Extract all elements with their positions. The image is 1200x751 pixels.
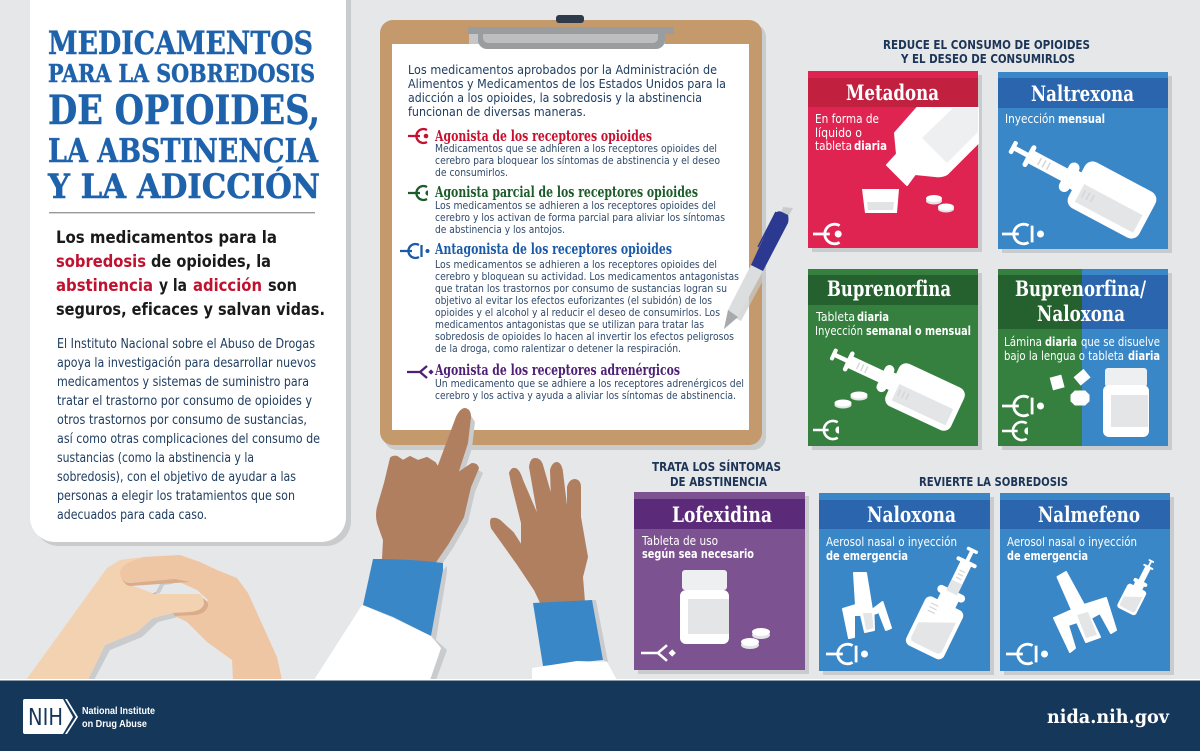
clipboard text bbox=[400, 62, 744, 402]
card: Metadona: diaria bbox=[854, 139, 887, 153]
illustration: clasped light hands bbox=[26, 555, 282, 680]
body paragraph: tratar el trastorno por consumo de opioides y bbox=[57, 394, 312, 409]
card: Lofexidina: Lofexidina bbox=[672, 502, 772, 527]
subtitle statement: seguros, eficaces y salvan vidas. bbox=[56, 300, 325, 319]
title: LA ABSTINENCIA bbox=[48, 131, 318, 170]
icon: antagonist symbol bbox=[826, 644, 868, 664]
definition: adrenergic agonist bbox=[407, 362, 744, 402]
intro text: adicción a los opioides, la sobredosis y la abstinencia bbox=[408, 90, 702, 105]
shirt cuff bbox=[363, 559, 443, 636]
definition: opioid agonist: de consumirlos. bbox=[435, 166, 508, 179]
footer bar bbox=[0, 679, 1200, 751]
icon: antagonist symbol bbox=[1002, 396, 1044, 416]
card: Naloxona: Naloxona bbox=[867, 502, 956, 527]
website: nida.nih.gov bbox=[1047, 706, 1170, 728]
definition: opioid agonist: cerebro para bloquear los síntomas de abstinencia y el deseo bbox=[435, 154, 720, 167]
section heading: reduce use bbox=[883, 38, 1090, 66]
card: Naloxona bbox=[819, 493, 994, 675]
icon: agonist bbox=[408, 129, 428, 143]
NIH logo bbox=[23, 699, 78, 734]
icon: methadone bottle bbox=[887, 108, 978, 185]
card: Metadona: Metadona bbox=[846, 80, 939, 105]
title bbox=[47, 24, 320, 207]
card: Lofexidina: según sea necesario bbox=[642, 547, 754, 561]
card: Lofexidina: Tableta de uso bbox=[641, 534, 718, 548]
institute name bbox=[82, 706, 155, 730]
card: Metadona: líquido o bbox=[815, 126, 862, 140]
icon: nasal spray bbox=[843, 573, 891, 638]
icon: pill bottle bbox=[680, 570, 729, 644]
icon: small vial and syringe bbox=[1116, 555, 1161, 616]
institute name: on Drug Abuse bbox=[82, 719, 147, 730]
card: Buprenorfina bbox=[808, 269, 982, 450]
definition: antagonist: Antagonista de los receptores opioides bbox=[434, 241, 672, 258]
icon: syringe and vial bbox=[999, 124, 1160, 242]
card: Nalmefeno bbox=[1000, 493, 1174, 675]
intro text bbox=[408, 62, 726, 119]
body paragraph: así como otras complicaciones del consumo de bbox=[57, 431, 320, 447]
card: Buprenorfina/Naloxona: bajo la lengua o tableta bbox=[1004, 349, 1124, 363]
definition: antagonist: sobredosis de opioides lo hacen al invertir los efectos peligrosos bbox=[435, 330, 734, 343]
card: Metadona bbox=[808, 71, 982, 252]
subtitle statement: Los medicamentos para la bbox=[56, 228, 277, 247]
card: Buprenorfina/Naloxona bbox=[998, 269, 1172, 450]
icon: tablets bbox=[741, 628, 770, 649]
definition: antagonist bbox=[400, 241, 739, 355]
intro text: Alimentos y Medicamentos de los Estados Unidos para la bbox=[408, 76, 726, 91]
body paragraph bbox=[57, 337, 320, 523]
card: Naltrexona: Naltrexona bbox=[1031, 81, 1134, 106]
definition: partial agonist: Los medicamentos se adhieren a los receptores opioides del bbox=[435, 199, 716, 212]
definition: antagonist: que tratan los trastornos por consumo de sustancias logran su bbox=[435, 282, 727, 295]
definition: opioid agonist: Medicamentos que se adhieren a los receptores opioides del bbox=[435, 142, 717, 155]
icon: adrenergic agonist bbox=[407, 366, 434, 378]
lab coat sleeve bbox=[314, 605, 441, 680]
card: Naltrexona bbox=[998, 72, 1172, 253]
card: Naloxona: Aerosol nasal o inyección bbox=[826, 535, 957, 549]
definition: partial agonist: cerebro y los activan de forma parcial para aliviar los síntomas bbox=[435, 211, 725, 224]
intro text: Los medicamentos aprobados por la Administración de bbox=[408, 62, 717, 77]
definition: antagonist: Los medicamentos se adhieren a los receptores opioides del bbox=[435, 258, 717, 271]
NIH logo: NIH bbox=[28, 705, 63, 731]
definition: adrenergic agonist: cerebro y los activa y ayuda a aliviar los síntomas de abstinencia. bbox=[435, 389, 736, 402]
subtitle statement: abstinencia bbox=[56, 276, 153, 295]
card: Nalmefeno: Nalmefeno bbox=[1038, 502, 1140, 527]
icon: partial agonist bbox=[408, 186, 428, 200]
card: Nalmefeno: de emergencia bbox=[1007, 549, 1088, 563]
icon: cup bbox=[862, 189, 899, 213]
body paragraph: adecuados para cada caso. bbox=[57, 508, 207, 523]
illustration: open hand with coat bbox=[491, 459, 617, 680]
card: Naloxona: de emergencia bbox=[826, 549, 908, 563]
section heading: reduce use: REDUCE EL CONSUMO DE OPIOIDES bbox=[883, 38, 1090, 52]
body paragraph: apoya la investigación para desarrollar nuevos bbox=[57, 355, 316, 371]
card: Buprenorfina: Buprenorfina bbox=[827, 276, 951, 301]
subtitle statement: sobredosis bbox=[56, 252, 146, 271]
icon: pill bottle bbox=[1103, 368, 1149, 437]
card: Buprenorfina/Naloxona: diaria bbox=[1128, 349, 1160, 363]
title: Y LA ADICCIÓN bbox=[47, 166, 320, 207]
icon: syringe and vial bbox=[822, 332, 968, 433]
card: Metadona: tableta bbox=[815, 139, 852, 153]
icon: antagonist bbox=[400, 244, 430, 258]
section heading: withdrawal: TRATA LOS SÍNTOMAS bbox=[652, 459, 781, 474]
card: Buprenorfina/Naloxona: diaria bbox=[1045, 335, 1077, 349]
shirt cuff bbox=[533, 600, 603, 666]
card: Buprenorfina: Tableta bbox=[815, 310, 855, 324]
icon: tablets bbox=[834, 392, 868, 408]
subtitle statement: son bbox=[268, 276, 297, 295]
icon: nasal spray bbox=[1054, 572, 1116, 652]
icon: antagonist symbol bbox=[1002, 224, 1044, 244]
body paragraph: sustancias (como la abstinencia y la bbox=[57, 451, 254, 466]
card: Buprenorfina/Naloxona: Lámina bbox=[1004, 335, 1042, 349]
definition: antagonist: cerebro y bloquean su actividad. Los medicamentos antagonistas bbox=[435, 270, 739, 283]
definition: partial agonist: Agonista parcial de los receptores opioides bbox=[434, 184, 698, 201]
icon: pen bbox=[724, 207, 793, 329]
body paragraph: El Instituto Nacional sobre el Abuso de Drogas bbox=[57, 337, 315, 352]
definition: partial agonist bbox=[408, 184, 725, 236]
subtitle statement bbox=[56, 228, 325, 319]
title: PARA LA SOBREDOSIS bbox=[48, 59, 315, 88]
section heading: withdrawal bbox=[652, 459, 781, 489]
card: Naltrexona: Inyección bbox=[1005, 112, 1055, 126]
institute name: National Institute bbox=[82, 706, 155, 717]
definition: partial agonist: de abstinencia y los antojos. bbox=[435, 223, 565, 236]
definition: adrenergic agonist: Un medicamento que se adhiere a los receptores adrenérgicos del bbox=[435, 377, 744, 390]
icon: antagonist symbol bbox=[1006, 644, 1048, 664]
card: Naltrexona: mensual bbox=[1058, 112, 1105, 126]
definition: antagonist: de la droga, como ralentizar o detener la respiración. bbox=[435, 342, 681, 355]
card: Metadona: En forma de bbox=[815, 112, 879, 126]
card: Buprenorfina: semanal o mensual bbox=[866, 324, 971, 338]
subtitle statement: y la bbox=[159, 276, 187, 295]
subtitle statement: de opioides, la bbox=[151, 252, 271, 271]
subtitle statement: adicción bbox=[193, 276, 262, 295]
card: Buprenorfina/Naloxona: Buprenorfina/ bbox=[1015, 276, 1146, 301]
body paragraph: sobredosis), con el objetivo de ayudar a las bbox=[57, 470, 296, 485]
clipboard bbox=[380, 15, 766, 450]
definition: opioid agonist: Agonista de los receptores opioides bbox=[434, 128, 652, 145]
definition: opioid agonist bbox=[408, 128, 720, 179]
clipboard clip bbox=[468, 15, 674, 49]
section heading: overdose: REVIERTE LA SOBREDOSIS bbox=[919, 475, 1068, 489]
card: Buprenorfina: diaria bbox=[857, 310, 889, 324]
definition: antagonist: medicamentos antagonistas que se utilizan para tratar las bbox=[435, 318, 704, 331]
title: DE OPIOIDES, bbox=[48, 87, 320, 134]
card: Nalmefeno: Aerosol nasal o inyección bbox=[1007, 535, 1137, 549]
icon: adrenergic symbol bbox=[641, 645, 676, 661]
icon: partial agonist symbol bbox=[813, 421, 839, 439]
body paragraph: personas a elegir los tratamientos que son bbox=[57, 489, 295, 504]
icon: vial and syringe bbox=[904, 540, 992, 661]
card: Buprenorfina: Inyección bbox=[815, 324, 863, 338]
body paragraph: otros trastornos por consumo de sustancias, bbox=[57, 413, 307, 428]
card: Buprenorfina/Naloxona: que se disuelve bbox=[1081, 335, 1160, 349]
section heading: reduce use: Y EL DESEO DE CONSUMIRLOS bbox=[900, 52, 1075, 66]
icon: tablets bbox=[926, 195, 954, 212]
illustration: pointing hand with coat bbox=[314, 409, 483, 680]
icon: agonist symbol bbox=[813, 224, 842, 244]
definition: adrenergic agonist: Agonista de los receptores adrenérgicos bbox=[434, 362, 680, 379]
panel: left introduction bbox=[30, 0, 351, 546]
definition: antagonist: objetivo al evitar los efectos euforizantes (el subidón) de los bbox=[435, 294, 712, 307]
icon: film strips and tablet bbox=[1050, 369, 1091, 405]
card: Lofexidina bbox=[634, 492, 809, 674]
intro text: funcionan de diversas maneras. bbox=[408, 104, 586, 119]
icon: partial agonist symbol bbox=[1002, 422, 1028, 440]
section heading: withdrawal: DE ABSTINENCIA bbox=[670, 475, 767, 489]
title: MEDICAMENTOS bbox=[48, 24, 313, 62]
definition: antagonist: opioides y el alcohol y al reducir el deseo de consumirlos. Los bbox=[435, 306, 720, 319]
card: Buprenorfina/Naloxona: Naloxona bbox=[1037, 301, 1125, 326]
body paragraph: medicamentos y sistemas de suministro para bbox=[57, 375, 309, 390]
lab coat sleeve bbox=[532, 661, 617, 680]
